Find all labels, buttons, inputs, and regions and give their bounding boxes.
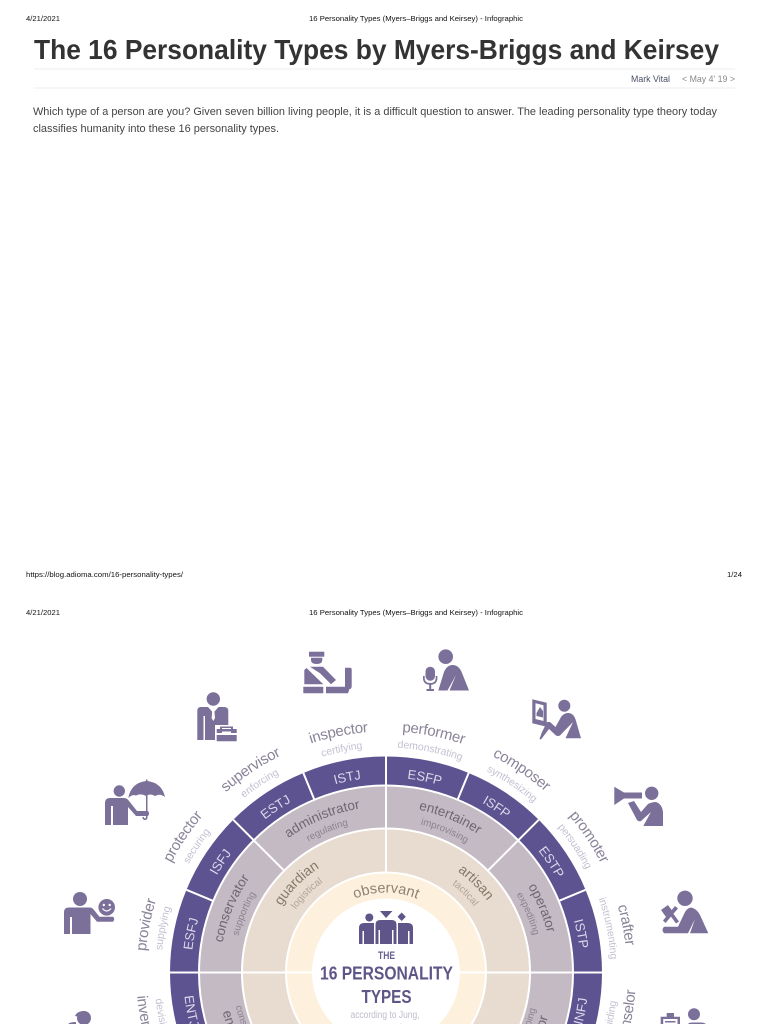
outer role labels: certifying: [322, 742, 362, 756]
outer role labels: supplying: [156, 906, 172, 950]
type codes: ESFP: [408, 770, 442, 784]
outer role labels: composer: [494, 750, 550, 790]
outer role labels: synthesizing: [487, 766, 536, 803]
grey ring labels: conservator: [216, 874, 248, 942]
byline: Mark Vital: [631, 74, 670, 84]
page 1 header: 4/21/2021: [26, 14, 60, 23]
grey ring labels: improvising: [421, 818, 468, 844]
grey ring labels: entertainer: [420, 803, 482, 833]
type codes: ISTP: [574, 919, 588, 948]
outer role labels: performer: [402, 724, 466, 744]
observant label: observant: [351, 880, 421, 902]
outer role labels: provider: [138, 898, 156, 951]
byline: [34, 69, 735, 88]
outer role labels: securing: [184, 829, 211, 864]
outer role labels: instrumenting: [599, 897, 618, 959]
icon: promoter: [614, 787, 663, 826]
outer role labels: inspector: [308, 724, 368, 744]
icon: protector: [105, 780, 165, 825]
type codes: ESTP: [538, 846, 564, 876]
grey ring labels: expediting: [517, 892, 538, 935]
centre title: TYPES: [362, 987, 412, 1007]
centre title: THE: [378, 950, 395, 962]
beige ring labels: guardian: [270, 857, 321, 908]
icon: inventor (partly cut): [68, 1011, 91, 1024]
beige ring labels: logistical: [289, 876, 325, 911]
icon: provider: [64, 892, 115, 934]
centre title: 16 PERSONALITY: [320, 964, 453, 984]
icon: three people: [359, 911, 413, 944]
intro paragraph: classifies humanity into these 16 personality types.: [33, 123, 279, 135]
type codes: ISFJ: [210, 848, 230, 874]
page 1 header: [26, 14, 523, 23]
grey ring labels: supporting: [234, 892, 256, 936]
outer role labels: promoter: [567, 811, 608, 862]
grey ring labels: administrator: [286, 801, 359, 838]
page 1 footer: [26, 570, 742, 579]
icon: performer: [423, 649, 469, 691]
article title: The 16 Personality Types by Myers-Briggs and Keirsey: [34, 34, 719, 65]
intro paragraph: Which type of a person are you? Given seven billion living people, it is a difficult question to answer. The leading personality type theory today: [33, 106, 717, 118]
page 2 header: [26, 608, 523, 617]
type codes: ESTJ: [260, 794, 290, 819]
centre title: according to Jung,: [350, 1010, 420, 1021]
type codes: [184, 770, 588, 1024]
intro paragraph: [33, 106, 717, 135]
byline: < May 4' 19 >: [682, 74, 735, 84]
type codes: ISFP: [483, 796, 510, 815]
beige ring labels: [276, 862, 492, 909]
outer role labels: crafter: [618, 905, 634, 945]
grey ring labels: [216, 801, 554, 1024]
icon: counselor (partly cut): [661, 1008, 706, 1024]
centre title: [320, 950, 453, 1024]
grey ring labels: operator: [529, 884, 554, 932]
page 1 footer: https://blog.adioma.com/16-personality-types/: [26, 570, 184, 579]
outer role labels: persuading: [556, 824, 591, 870]
type codes: ESFJ: [184, 918, 198, 950]
concentric wheel: [170, 756, 602, 1024]
page 1 footer: 1/24: [727, 570, 742, 579]
page 2 header: 4/21/2021: [26, 608, 60, 617]
icon: composer: [532, 699, 581, 740]
icon: supervisor: [197, 692, 237, 741]
beige ring labels: artisan: [456, 861, 498, 903]
type codes: ISTJ: [334, 770, 360, 784]
icon: crafter: [661, 891, 708, 933]
outer role labels: [137, 724, 636, 1024]
page 2 header: 16 Personality Types (Myers–Briggs and Keirsey) - Infographic: [309, 608, 523, 617]
icon: inspector: [303, 652, 352, 693]
beige ring labels: tactical: [450, 878, 480, 908]
outer role labels: demonstrating: [398, 740, 462, 762]
grey ring labels: regulating: [306, 820, 348, 842]
outer role labels: protector: [164, 811, 202, 864]
page 1 header: 16 Personality Types (Myers–Briggs and Keirsey) - Infographic: [309, 14, 523, 23]
outer role labels: enforcing: [242, 770, 279, 797]
outer role labels: supervisor: [222, 748, 279, 792]
